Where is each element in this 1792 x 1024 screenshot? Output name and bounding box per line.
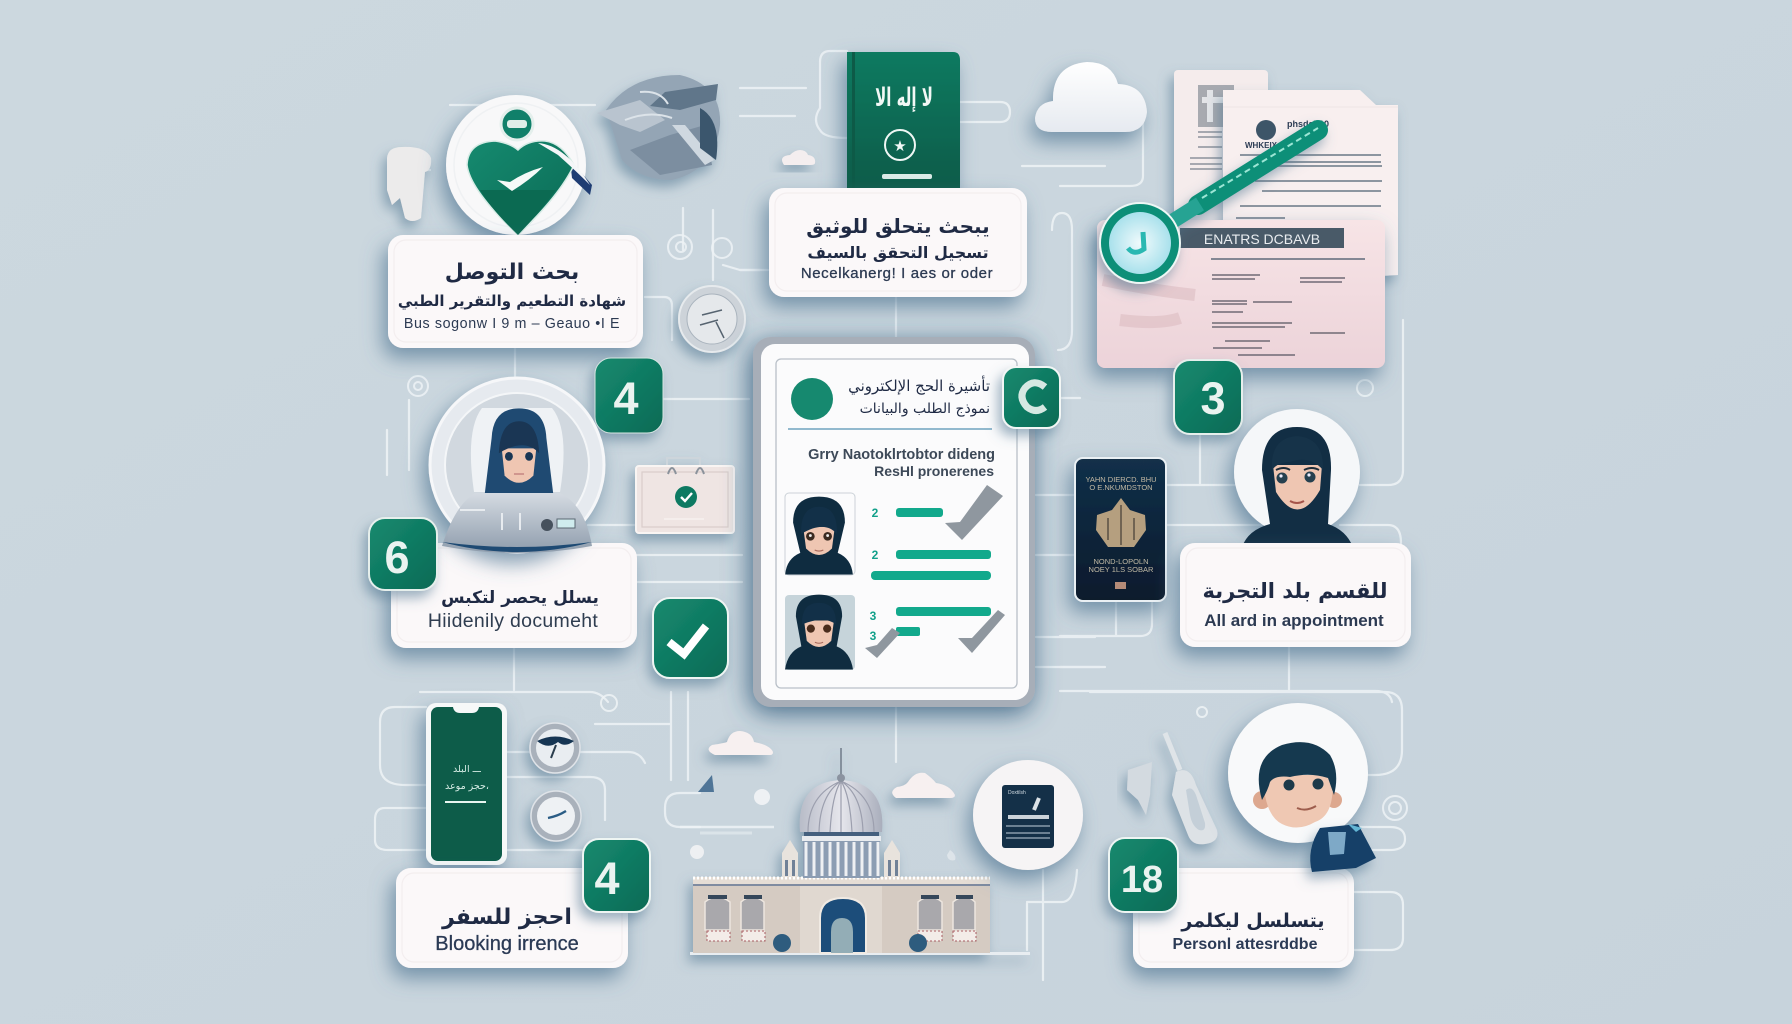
photo 1 xyxy=(785,493,855,575)
icon: document in circle: Doxtilsh xyxy=(1008,790,1026,796)
icon: dark passport: O E.NKUMDSTON xyxy=(1089,483,1153,492)
icon: clouds over building xyxy=(709,731,955,798)
form subtitle: Grry Naotoklrtobtor dideng xyxy=(808,447,995,463)
icon: dark passport: NOEY 1LS SOBAR xyxy=(1089,565,1154,574)
card: booking: احجز للسفر xyxy=(441,905,572,930)
decorative line with dot xyxy=(1022,165,1105,167)
icon: document stack with magnifier xyxy=(1097,70,1398,368)
card: personal attendance: يتسلسل ليكلمر xyxy=(1180,910,1325,932)
card: necessary papers: يبحث يتحلق للوثيق xyxy=(806,214,990,238)
badge: number 18: 18 xyxy=(1121,859,1163,901)
card: necessary papers xyxy=(769,188,1027,297)
icon: smartphone: ـــ البلد xyxy=(453,764,481,775)
front paper: WHKEIX xyxy=(1245,141,1278,150)
card: health requirement xyxy=(388,235,643,348)
card: necessary papers: Necelkanerg! I aes or oder xyxy=(801,265,993,282)
icon: dark passport: NOND-LOPOLN xyxy=(1093,557,1149,566)
icon: boy portrait xyxy=(1228,703,1368,843)
icon: key fob xyxy=(1165,733,1218,844)
checklist rows: 3 xyxy=(870,629,877,643)
badge: number 4 lower: 4 xyxy=(594,853,620,904)
checklist rows: 2 xyxy=(872,506,879,520)
icon: smartphone: حجز موعد، xyxy=(445,781,489,792)
drum xyxy=(803,840,880,878)
icon: green passport: لا إله الا xyxy=(875,83,933,112)
front paper: phsdaL10 xyxy=(1287,119,1329,129)
badge: number 4 xyxy=(595,358,663,433)
central tablet form: ResHl pronerenes xyxy=(874,463,994,479)
card: appointment: All ard in appointment xyxy=(1204,611,1384,630)
badge: number 3: 3 xyxy=(1200,373,1226,424)
badge: number 6 xyxy=(369,518,437,590)
card: personal attendance: Personl attesrddbe xyxy=(1173,936,1318,953)
icon: small decorations near building xyxy=(680,775,1077,980)
icon: woman portrait xyxy=(1234,409,1360,547)
badge: refresh xyxy=(1003,367,1060,428)
connector lines xyxy=(375,51,1405,950)
badge: number 6: 6 xyxy=(384,532,410,583)
badge: number 3 xyxy=(1174,360,1242,434)
icon: gauge two xyxy=(531,791,581,841)
central tablet form: نموذج الطلب والبيانات xyxy=(860,401,990,417)
icon: large cloud xyxy=(1035,62,1147,132)
icon: small cloud xyxy=(782,150,815,165)
magnifier xyxy=(1100,128,1318,283)
icon: clock gauge xyxy=(679,286,745,352)
checklist rows: 2 xyxy=(872,548,879,562)
card: necessary papers: تسجيل التحقق بالسيف xyxy=(807,243,989,262)
trees xyxy=(773,934,791,952)
woman in scanner xyxy=(484,408,554,496)
card: health requirement: شهادة التطعيم والتقرير الطبي xyxy=(398,292,626,310)
icon: crumpled globe xyxy=(597,75,720,180)
icon: dark passport: YAHN DIERCD. BHU xyxy=(1085,475,1157,484)
card: appointment: للقسم بلد التجربة xyxy=(1202,579,1388,603)
dome xyxy=(800,780,882,832)
turrets xyxy=(782,840,900,877)
icon: health heart in circle xyxy=(446,95,592,235)
checklist rows xyxy=(870,506,879,643)
back paper xyxy=(1174,70,1268,230)
card: appointment xyxy=(1180,543,1411,647)
pink form xyxy=(1097,220,1385,368)
icon: scanner with woman xyxy=(430,378,604,553)
badge: number 18 xyxy=(1109,838,1178,912)
icon: smartphone xyxy=(426,703,507,865)
building with dome xyxy=(690,748,1030,955)
card: identity document: Hiidenily documeht xyxy=(428,610,598,632)
icon: ghost-like tag xyxy=(387,147,431,221)
card: identity document: يسلل يحصر لتكبس xyxy=(441,588,599,608)
checklist rows: 3 xyxy=(870,609,877,623)
decorative spirals and small circles xyxy=(408,235,1407,820)
icon: blue badge pouch xyxy=(1310,824,1376,872)
card: identity document xyxy=(391,543,637,648)
card: personal attendance xyxy=(1133,868,1354,968)
badge: check xyxy=(653,598,728,678)
pink form: ENATRS DCBAVB xyxy=(1204,231,1320,247)
icon: green passport xyxy=(847,52,960,194)
emblem xyxy=(791,378,833,420)
badge: number 4 lower xyxy=(583,839,650,912)
icon: document in circle xyxy=(973,760,1083,870)
card: booking xyxy=(396,868,628,968)
icon: dark passport xyxy=(1075,458,1166,601)
front paper xyxy=(1223,90,1398,285)
check marks xyxy=(865,485,1005,658)
badge: number 4: 4 xyxy=(613,373,639,424)
icon: green passport: ★ xyxy=(893,138,907,155)
central tablet form xyxy=(753,337,1035,707)
form title: تأشيرة الحج الإلكتروني xyxy=(848,375,990,396)
icon: gauge one xyxy=(530,723,580,773)
card: booking: Blooking irrence xyxy=(435,933,579,955)
photo 2 xyxy=(785,595,855,670)
icon: folded note xyxy=(1127,762,1152,815)
card: health requirement: Bus sogonw I 9 m – Geauo •I E xyxy=(404,316,620,332)
card: health requirement: بحث التوصل xyxy=(445,260,579,285)
icon: checked briefcase xyxy=(636,458,734,533)
